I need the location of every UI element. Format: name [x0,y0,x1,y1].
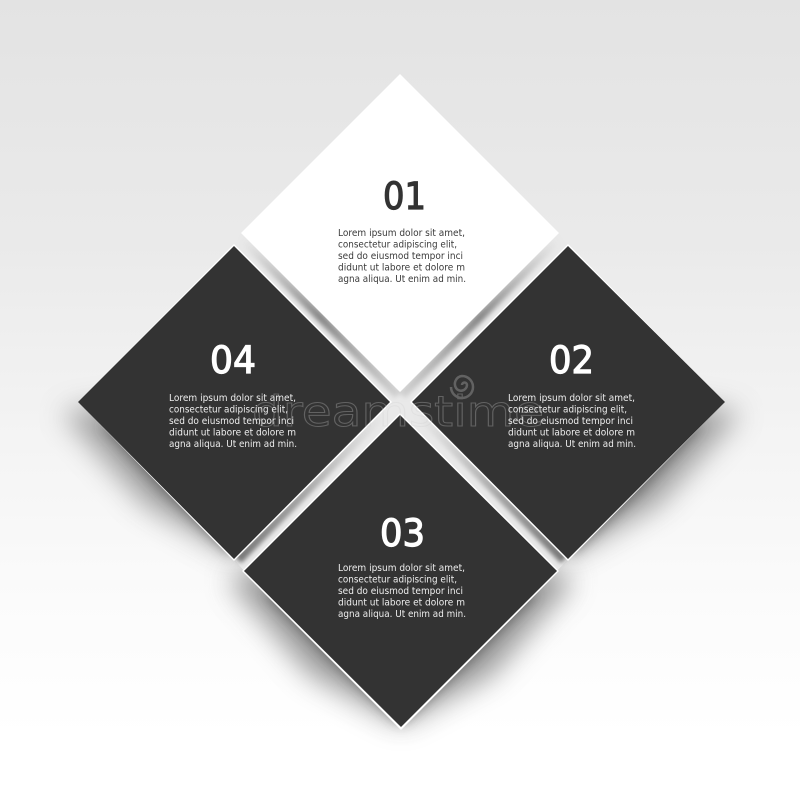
white edge: panel 04 [78,244,392,561]
diamond 03 [244,415,557,727]
watermark wordmark: dreamstime [252,387,544,436]
panel 03 [244,415,557,727]
text block 01: Lorem ipsum dolor sit amet, [338,228,465,239]
shadow: panel 02 [503,400,741,556]
text block 03: consectetur adipiscing elit, [338,574,457,586]
text block 02: Lorem ipsum dolor sit amet, [508,393,635,404]
gap bands [234,233,568,571]
shadow: panel 04 lower-right [238,412,385,560]
shadow: panel 04 [62,400,300,556]
text block 04: Lorem ipsum dolor sit amet, [169,393,296,404]
watermark [252,376,544,436]
gap shadows [238,240,564,560]
panel 01 [241,74,559,392]
text block 02: consectetur adipiscing elit, [508,404,627,416]
shadow: panel 03 [228,500,574,724]
text block 04: agna aliqua. Ut enim ad min. [169,439,297,450]
text block 02: sed do eiusmod tempor inci [508,416,633,427]
diamond 02 [412,246,725,559]
number 02: 02 [549,339,594,382]
panel 02 [412,246,725,559]
text block 02: agna aliqua. Ut enim ad min. [508,439,636,450]
text block 01: sed do eiusmod tempor inci [338,251,463,262]
number 01: 01 [383,175,426,218]
number 03: 03 [380,512,425,555]
text block 04: didunt ut labore et dolore m [169,428,296,438]
panel 04 [78,246,390,559]
diamond 04 [78,246,390,559]
shadow: panel 01 lower-left [243,240,398,395]
text block 03: didunt ut labore et dolore m [338,598,465,608]
text block 01: didunt ut labore et dolore m [338,262,465,274]
text block 03: Lorem ipsum dolor sit amet, [338,563,465,574]
watermark spiral icon [451,376,473,398]
text block 04: consectetur adipiscing elit, [169,404,288,416]
text block 01: consectetur adipiscing elit, [338,240,457,250]
number 04: 04 [210,339,256,382]
text block 03: sed do eiusmod tempor inci [338,586,463,597]
text block 02: didunt ut labore et dolore m [508,428,635,438]
diamond 01 [241,74,559,392]
text block 04: sed do eiusmod tempor inci [169,416,294,427]
text block 01: agna aliqua. Ut enim ad min. [338,274,466,285]
shadow: panel 01 lower-right [402,240,557,395]
white edge: panel 03 [242,413,559,730]
text block 03: agna aliqua. Ut enim ad min. [338,609,466,620]
shadow: panel 02 lower-left [417,412,564,560]
white edge: panel 02 [410,244,725,561]
